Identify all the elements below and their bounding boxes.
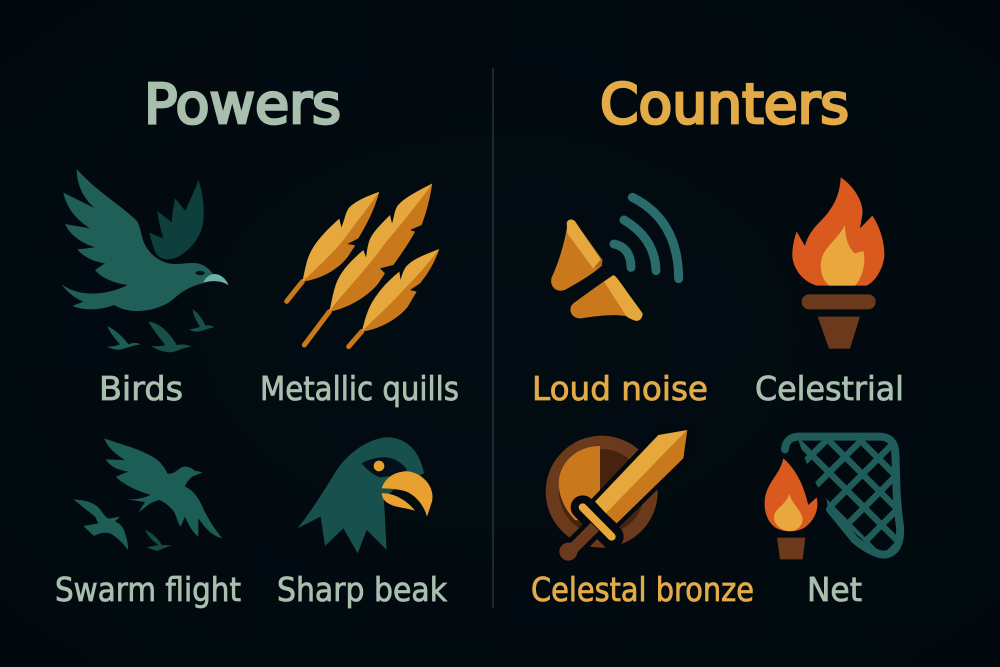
icon: raven with small birds [62,169,229,352]
icon: metallic quills [287,183,439,347]
label: Loud noise: Loud noise [532,369,708,408]
label: Swarm flight: Swarm flight [55,570,241,609]
label: Birds: Birds [99,369,183,408]
label: Metallic quills: Metallic quills [260,369,459,408]
heading: Counters: Counters [600,72,849,136]
icon: sword and shield [546,430,687,561]
label: Celestal bronze: Celestal bronze [531,570,754,609]
icon: eagle head with sharp beak [297,437,433,553]
icon: net with small torch [764,432,904,560]
label: Net: Net [807,570,862,609]
label: Sharp beak: Sharp beak [277,570,448,609]
icon: loud noise horn [551,197,679,321]
icon: torch [792,177,884,349]
icon: swarm of birds [73,438,222,551]
label: Celestrial: Celestrial [755,369,904,408]
net [781,432,904,559]
heading: Powers: Powers [144,72,341,136]
small torch [765,458,817,559]
